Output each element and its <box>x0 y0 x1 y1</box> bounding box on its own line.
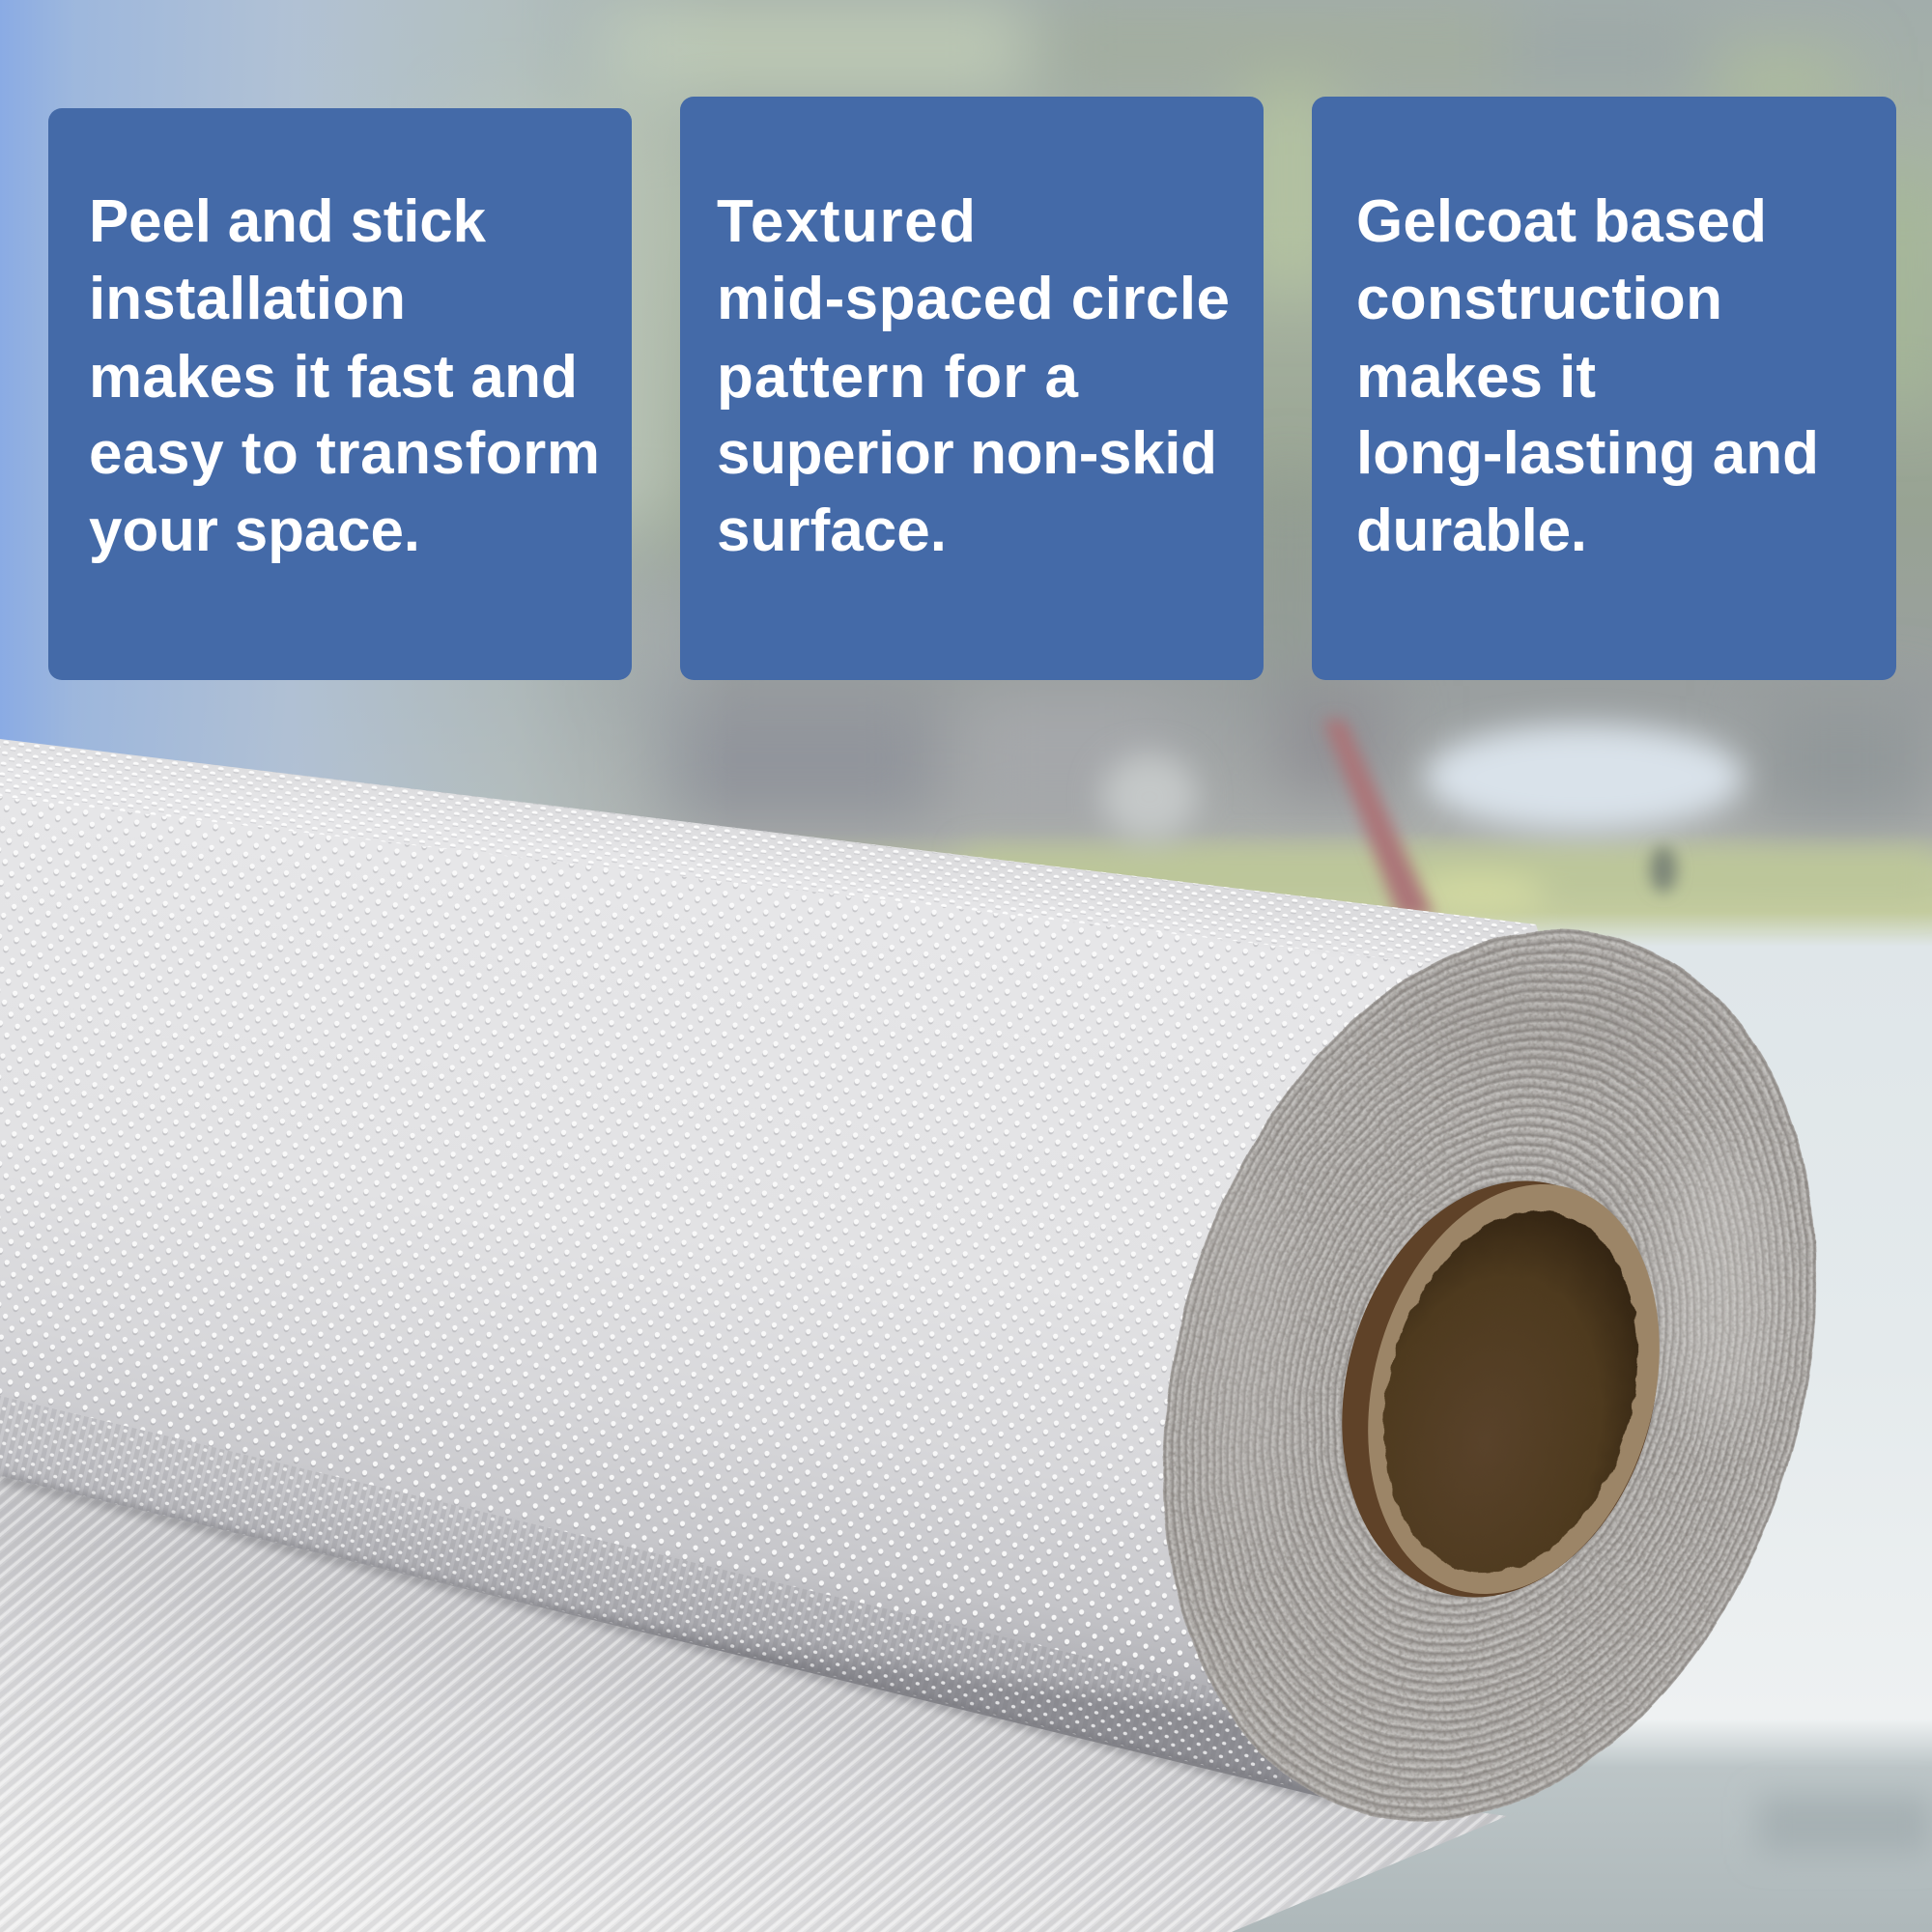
panel text: gelcoat construction: Gelcoat based <box>1356 188 1767 255</box>
panel text: peel and stick: your space. <box>89 497 420 564</box>
panel text: peel and stick: installation <box>89 266 406 332</box>
panel text: textured pattern: mid-spaced circle <box>717 266 1230 332</box>
panel text: textured pattern <box>717 188 1230 564</box>
panel: peel and stick <box>48 108 632 680</box>
panel text: peel and stick: makes it fast and <box>89 344 578 411</box>
panel text: peel and stick: easy to transform <box>89 420 600 487</box>
vinyl roll body with raised dot texture <box>0 739 1538 1806</box>
panel text: textured pattern: pattern for a <box>717 344 1079 411</box>
panel: textured pattern <box>680 97 1264 680</box>
core hollow interior <box>1346 1182 1676 1602</box>
core outer wall <box>1324 1151 1703 1627</box>
cardboard core tube <box>1297 1145 1703 1634</box>
roll end with concentric wound layers <box>1163 928 1817 1822</box>
panel: gelcoat construction <box>1312 97 1896 680</box>
white textured floor sheet <box>0 1476 1507 1932</box>
panel text: gelcoat construction: durable. <box>1356 497 1587 564</box>
panel text: textured pattern: superior non-skid <box>717 420 1217 487</box>
panel text: gelcoat construction: construction <box>1356 266 1722 332</box>
core shadowed left wall <box>1297 1145 1703 1634</box>
panel text: peel and stick: Peel and stick <box>89 188 487 255</box>
panel text: gelcoat construction <box>1356 188 1819 564</box>
panel text: textured pattern: surface. <box>717 497 947 564</box>
panel text: gelcoat construction: makes it <box>1356 344 1596 411</box>
panel text: peel and stick <box>89 188 600 564</box>
panel text: gelcoat construction: long-lasting and <box>1356 420 1819 487</box>
panel text: textured pattern: Textured <box>717 188 976 255</box>
